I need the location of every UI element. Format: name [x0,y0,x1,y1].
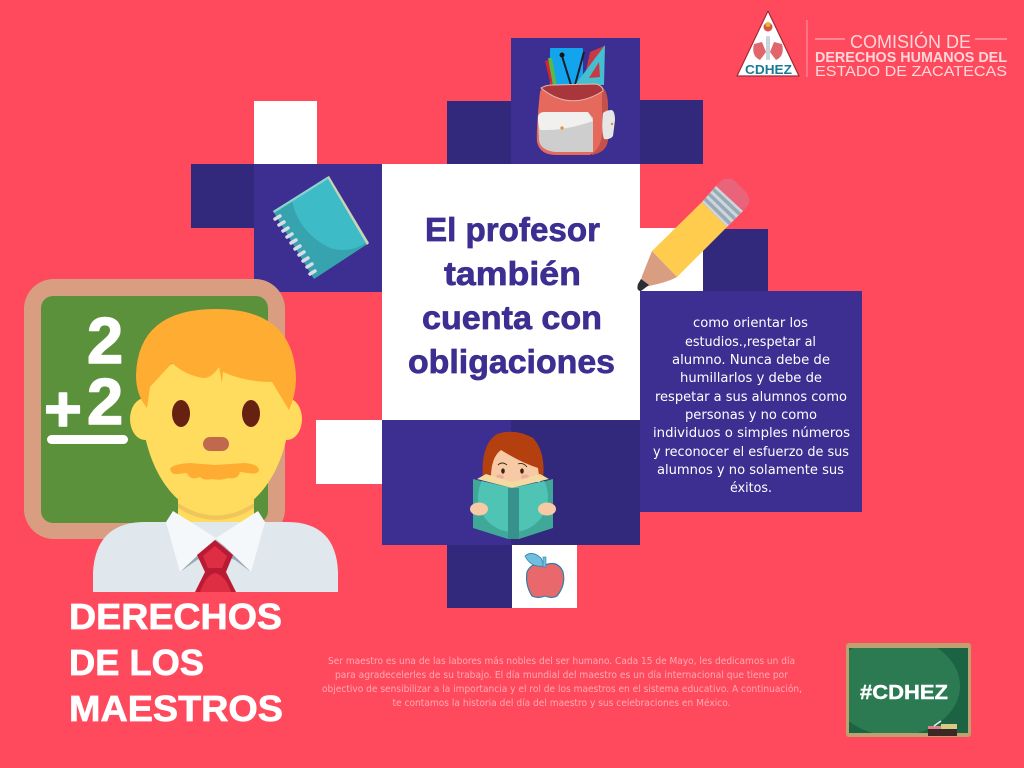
text block: obligations: respetar a sus alumnos como [655,390,847,405]
icon: teacher at chalkboard: + [44,372,82,445]
text block: obligations: alumnos y no solamente sus [657,463,844,478]
text: logo wordmark: COMISIÓN DE [850,31,971,52]
text block: obligations: individuos o simples números [653,426,850,441]
icon: teacher at chalkboard: 2 [87,304,123,377]
text block: intro paragraph: objectivo de sensibilizar a la importancia y el rol de los maestros en el sistema educativo. A continuación, [322,684,802,695]
text block: intro paragraph: te contamos la historia del día del maestro y sus celebraciones en México. [392,698,730,709]
panel: obligations text [640,291,862,512]
heading: derechos de los maestros: DE LOS [69,642,204,683]
text block: obligations: y reconocer el esfuerzo de sus [653,445,849,460]
heading: central title: obligaciones [408,343,615,380]
icon: pencil [637,178,749,291]
icon: apple [525,553,564,598]
text: logo wordmark: DERECHOS HUMANOS DEL [815,50,1007,66]
text block: obligations: humillarlos y debe de [680,371,822,386]
icon: notebook [273,176,369,279]
heading: central title: cuenta con [422,299,602,336]
heading: central title [408,211,615,380]
text block: obligations: estudios.,respetar al [685,335,816,350]
panel: central title card [382,164,640,420]
text block: obligations: éxitos. [730,481,772,496]
text block: intro paragraph: para agradecelerles de su trabajo. El día mundial del maestro es un día internacional que tiene por [335,670,788,681]
text block: obligations [653,316,850,496]
icon: hashtag chalkboard [846,643,971,737]
heading: derechos de los maestros: MAESTROS [69,688,283,729]
icon: teacher at chalkboard [24,279,338,592]
text block: obligations: como orientar los [693,316,808,331]
icon: logo triangle [737,11,799,77]
icon: logo triangle: CDHEZ [745,63,792,77]
icon: girl reading [470,432,556,539]
text: logo wordmark: ESTADO DE ZACATECAS [815,63,1007,80]
text block: intro paragraph: Ser maestro es una de las labores más nobles del ser humano. Cada 15 de Mayo, les dedicamos un día [328,656,795,667]
heading: derechos de los maestros [69,596,283,729]
icon: backpack [537,45,615,155]
panel: mosaic of squares [191,38,768,608]
heading: central title: El profesor [425,211,600,248]
text block: obligations: alumno. Nunca debe de [672,353,830,368]
logo: CDHEZ [737,11,1007,80]
icon: teacher at chalkboard: 2 [87,365,123,438]
text: logo wordmark [815,31,1007,80]
heading: derechos de los maestros: DERECHOS [69,596,282,637]
heading: central title: también [444,255,581,292]
text block: intro paragraph [322,656,802,709]
label: hashtag: #CDHEZ [860,682,948,704]
text block: obligations: personas y no como [685,408,817,423]
